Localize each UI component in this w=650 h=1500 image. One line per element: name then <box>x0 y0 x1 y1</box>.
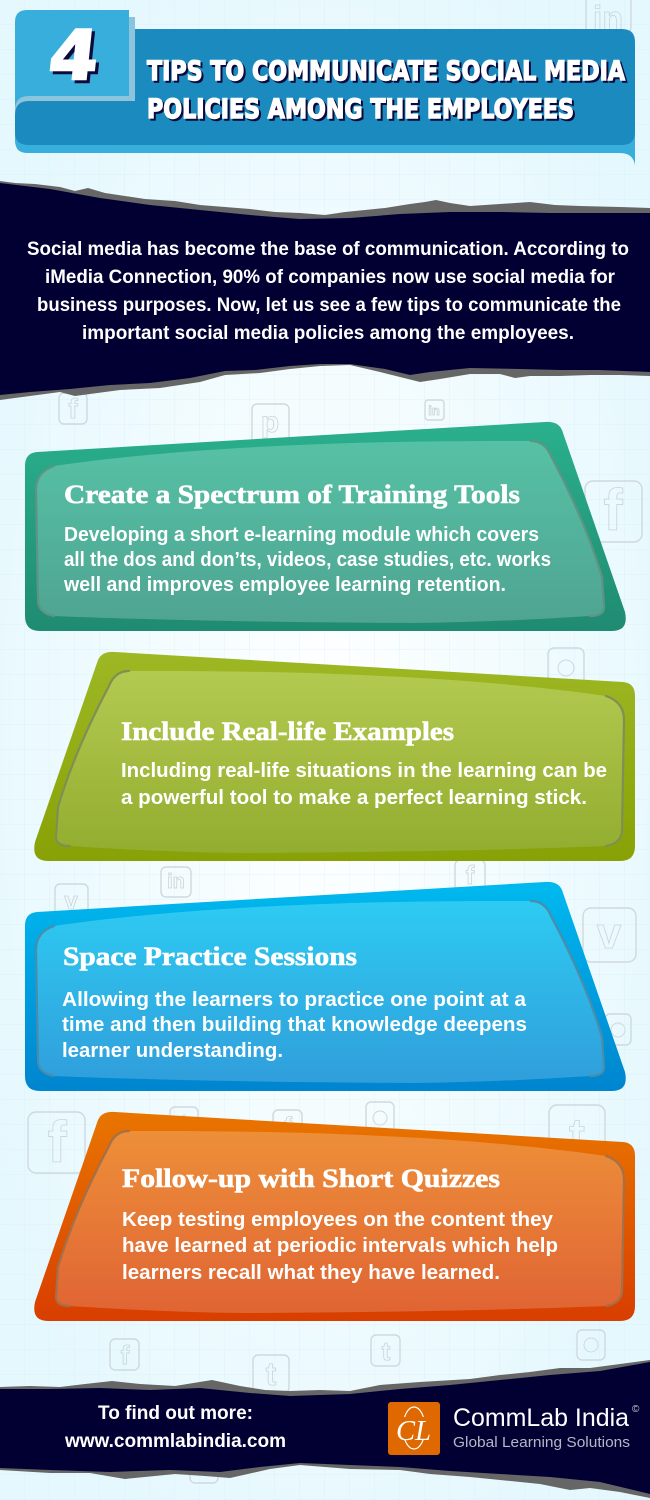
social media icons background: in <box>167 871 185 893</box>
social media icons background: f <box>603 478 623 543</box>
call to action text: To find out more: <box>98 1403 253 1424</box>
call to action text: www.commlabindia.com <box>64 1431 286 1452</box>
heading: Follow-up with Short Quizzes <box>122 1164 500 1193</box>
social media icons background: t <box>180 1110 188 1137</box>
heading: Create a Spectrum of Training Tools <box>64 480 520 509</box>
heading: Space Practice Sessions <box>63 942 357 971</box>
number 4: 4 <box>45 17 102 96</box>
social media icons background: t <box>569 1110 585 1163</box>
body text <box>63 524 551 596</box>
logo wordmark <box>453 1404 640 1451</box>
body text: Allowing the learners to practice one point at a <box>62 989 527 1011</box>
body text: a powerful tool to make a perfect learning stick. <box>121 787 587 809</box>
intro text <box>27 239 629 344</box>
logo wordmark: Global Learning Solutions <box>453 1434 630 1451</box>
number 4: 4 <box>48 20 105 99</box>
body text <box>121 760 607 809</box>
torn dark intro band <box>0 181 650 400</box>
body text <box>122 1209 558 1284</box>
body text: well and improves employee learning retention. <box>63 574 506 596</box>
number square shadow <box>15 17 135 115</box>
intro text: important social media policies among the employees. <box>82 323 574 344</box>
body text: Keep testing employees on the content they <box>122 1209 554 1231</box>
social media icons background: p <box>261 406 279 439</box>
panel: include real-life examples <box>34 652 635 861</box>
social media icons background: f <box>68 393 78 424</box>
body text: learner understanding. <box>62 1040 283 1062</box>
social media icons background: t <box>382 1336 391 1366</box>
social media icons background: v <box>64 888 78 915</box>
heading: Include Real-life Examples <box>121 717 454 746</box>
body text: learners recall what they have learned. <box>122 1262 500 1284</box>
body text: Developing a short e-learning module which covers <box>64 524 539 546</box>
panel: create a spectrum of training tools <box>25 422 626 631</box>
social media icons background: f <box>121 1340 130 1370</box>
banner lower fold <box>15 60 635 165</box>
intro text: Social media has become the base of communication. According to <box>27 239 629 260</box>
social media icons background: f <box>466 860 475 890</box>
social media icons background: f <box>284 1113 293 1140</box>
social media icons background: in <box>593 0 623 38</box>
body text: Including real-life situations in the learning can be <box>121 760 607 782</box>
intro text: iMedia Connection, 90% of companies now use social media for <box>45 267 616 288</box>
logo wordmark: © <box>632 1404 640 1415</box>
logo wordmark: CommLab India <box>453 1404 629 1432</box>
icon: CommLab logo mark: CL <box>396 1415 431 1447</box>
body text: all the dos and don’ts, videos, case studies, etc. works <box>64 549 551 571</box>
body text: have learned at periodic intervals which help <box>122 1235 558 1257</box>
social media icons background: f <box>47 1110 67 1175</box>
panel: space practice sessions <box>25 882 626 1091</box>
header banner <box>15 10 635 165</box>
torn dark footer band <box>0 1360 650 1498</box>
call to action text <box>64 1403 286 1452</box>
icon: CommLab logo mark <box>388 1402 440 1455</box>
banner main panel <box>15 29 635 145</box>
body text <box>62 989 527 1062</box>
social media icons background: v <box>597 909 622 958</box>
number square <box>15 10 129 110</box>
panel: follow-up with short quizzes <box>34 1112 635 1321</box>
title <box>147 56 627 127</box>
intro text: business purposes. Now, let us see a few tips to communicate the <box>37 295 621 316</box>
social media icons background: t <box>266 1356 277 1392</box>
body text: time and then building that knowledge deepens <box>62 1014 527 1036</box>
social media icons background: in <box>428 403 440 418</box>
